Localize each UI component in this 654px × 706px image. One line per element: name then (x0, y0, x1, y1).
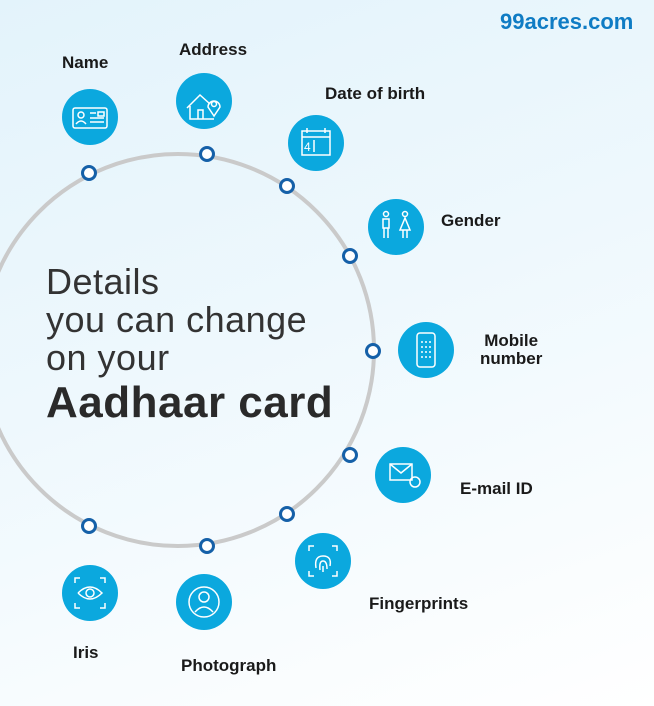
title: you can change (46, 299, 307, 340)
title: Aadhaar card (46, 378, 333, 427)
label: email: E-mail ID (460, 479, 533, 498)
title: on your (46, 337, 170, 378)
label: fingerprints: Fingerprints (369, 594, 468, 613)
label: name: Name (62, 53, 108, 72)
circle diagram: 4 (304, 140, 311, 154)
label: mobile number: Mobile (484, 331, 538, 350)
label: photograph: Photograph (181, 656, 276, 675)
title (46, 261, 333, 427)
label: date of birth: Date of birth (325, 84, 425, 103)
logo: 99acres.com (500, 9, 633, 34)
label: gender: Gender (441, 211, 501, 230)
label: iris: Iris (73, 643, 99, 662)
title: Details (46, 261, 160, 302)
label: mobile number (480, 331, 542, 368)
label: address: Address (179, 40, 247, 59)
label: mobile number: number (480, 349, 542, 368)
